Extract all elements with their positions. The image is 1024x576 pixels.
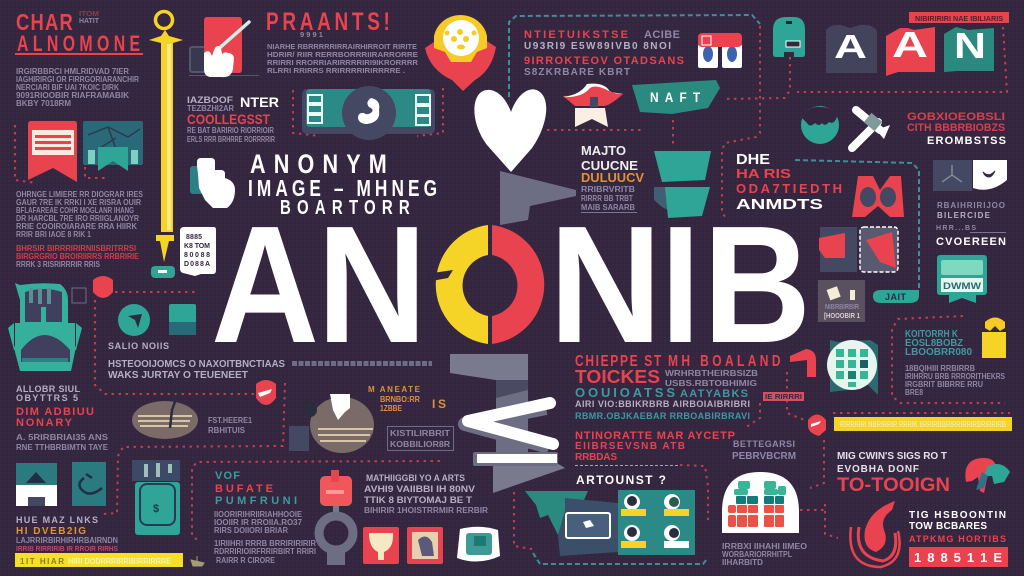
text block: erombstss: CITH BBBRBIOBZS [907,122,1005,134]
banner: yellow bar left: 1IT HIAR [20,557,64,566]
text block: small gray: FST.HEERE1 [208,416,252,425]
icon: teal tag [151,266,175,278]
banner: teal ribbon naft [632,80,720,114]
text block: orange note: M ANEATE [368,385,421,394]
text block: cvoereen: CVOEREEN [936,236,1006,248]
heading: char alnomone: ALNOMONE [17,33,140,57]
text block: intro paragraph [16,67,139,108]
text block: top center [524,29,684,78]
badge: red box with numbers [909,547,1008,567]
text block: hue maz links: HUE MAZ LNKS [16,515,98,525]
callout: speech card: D088A [184,261,210,268]
text block: center right headline: RBMR.OBJKAEBAR RRBOABIRBRAVI [575,411,750,421]
icon tiles: letters a a n: N [954,25,986,66]
text block: allobr: ALLOBR SIUL [16,384,80,394]
icon tiles: letters a a n: A [834,28,867,65]
text block: salio notes: HSTEOOIJOMCS O NAXOITBNCTIAAS [108,359,285,370]
text block: right gray paragraph: IRGBRIT BIBRRE RRU [905,380,983,389]
text block: center right headline: CHIEPPE ST [575,351,662,369]
text block: intro paragraph: 9091RIOOBIR RIAFRAMABIK [16,91,129,100]
text block: lower center: AVHI9 VAIIBBI IH 80NV [364,484,475,494]
subtitle: anonym image board: ANONYM [250,150,387,180]
icon: green bookmark card: DWMW [943,281,982,291]
main title: anonib: N [549,192,662,378]
text block: majto: MAIB SARARB [581,203,635,212]
text block: vof bufate: IOOIIR IR RROIIA.RO37 [214,518,303,527]
icon: yellow medal [425,15,496,91]
icon: backpack [8,283,86,371]
text block: second paragraph: BFLAFAREAE COHR MOGLANR IHANG [16,206,134,215]
icon: teal house tile [16,463,57,506]
text block: salio notes [108,341,285,381]
heading: char alnomone [15,10,143,57]
text block: hue maz links [16,515,118,553]
text block: dhe anmdts: ANMDTS [736,196,823,213]
text block: top center: ACIBE [644,29,680,41]
icon: red hat [563,84,623,127]
text block: praants paragraph: RRIRRI RRORRIARIRRRRIRI9IKRORRRR [267,60,418,67]
text block: allobr: DIM ADBIUU [16,406,94,418]
text block: praants paragraph [267,32,418,75]
icon: teal tile [169,304,196,335]
icon: white teal badge [457,527,500,562]
text block: intro paragraph: NERCIARI BIF UAI 7KOIC DIRK [16,83,119,92]
text block: erombstss: EROMBSTSS [927,135,1006,147]
text block: second paragraph: OHRNGE LIMIERE RR DIOGRAR IRES [16,190,144,199]
text block: center right headline: RRBDAS [575,452,617,463]
text block: praants paragraph: NIARHE RBRRRRRIRRAIRHIRROIT RIRITE [267,44,417,51]
main title: anonib [211,192,811,378]
text block: center right headline: USBS.RBTOBHIMIG [665,379,757,388]
text block: intro paragraph: IRGIRBBRCI HMLRIDVAD 7IER [16,67,129,76]
callout: speech card: K8 TOM [184,243,210,250]
icon: teal gadget: $ [153,503,159,515]
text block: vof bufate: RIRS DOIIORI BRIAR [214,526,288,535]
icon: green bookmark card [937,255,987,303]
text block: salio notes: WAKS JURTAY O TEUENEET [108,370,248,381]
tag: red small label: IE RIRRRI [765,394,802,401]
text block: right gray paragraph: KOITORRH K [905,329,959,340]
icon: red bookmark [28,121,77,182]
text block: lower center: TTIK 8 BIYTOMAJ BE T [364,495,473,505]
text block: bettegarsi [732,439,796,462]
icon: teal map with ribbon [83,121,143,171]
icon: shoes [698,33,742,68]
text block: below dome: IRRBXI IIHAHI IIMEO [722,542,807,551]
text block: right gray paragraph: IRIHRRU BRB RRRORITHEKRS [905,372,1006,381]
icon: red tile with cream funnel [363,527,399,564]
text block: center right headline: ARTOUNST ? [576,473,666,487]
dashed row of squares [292,361,432,366]
icon: teal ticket [302,86,435,140]
text block: center right headline: EIIBRSEVSNB ATB [575,441,685,452]
text block: tig hsboontin: TOW BCBARES [909,521,987,532]
text block: dhe anmdts [736,151,842,213]
text block: cvoereen: H R R . . . B S [936,225,976,232]
icon: red pin left [93,276,113,298]
text block: collegsst: RE BAT BARIRIO RIORRIOIR [187,126,274,135]
icon: teal circle [118,304,150,336]
text block: allobr: OBYTTRS 5 [16,393,78,403]
outlined gray box: KISTILIRBRIT [390,429,450,438]
text block: top center: 9IRROKTEOV OTADSANS [524,55,684,67]
text block: red note: RRRK 3 RISRIRRRIR RRIS [16,260,101,269]
text block: second paragraph: GAUR 7RE IK RRKI I XE RISRA OUIR [16,198,141,207]
icon: red drop pin [808,414,826,436]
icon: teal globe grid [827,340,878,395]
icon: red and teal trees [965,458,1010,493]
callout: speech card: 80088 [184,252,210,259]
badge: teal pill: JAIT [885,292,906,302]
icon: teal squiggle tile [72,462,106,506]
text block: right gray paragraph: EOSL8BOBZ [905,338,963,349]
icon: gray note card: [HOOOBIR 1 [824,313,860,320]
text block: allobr: NONARY [16,417,73,429]
text block: small gray: RBHITUIS [208,426,246,435]
icon: gray y shape with white chevron [450,354,565,493]
subtitle: anonym image board [248,150,437,219]
icon: split tiles [819,227,898,272]
heading: char alnomone: HATIT [79,18,100,25]
icon: red tile with portrait [407,527,443,564]
text block: center right headline: NTINORATTE MAR AYCETP [575,430,735,442]
text block: collegsst: ERLS RRR BRHRRE RORRRRIR [187,135,275,144]
text block: vof bufate: VOF [215,470,240,482]
text block: below dome: IIHARBITD [722,558,763,567]
text block: majto: CUUCNE [581,158,638,173]
icon: teal gadget [132,460,180,535]
text block: center right headline: AIRI VIO:BBIKRBRB AIRBOIAIBRIBRI [575,399,750,409]
icon tiles: letters a a n [826,24,994,76]
heading: char alnomone: CHAR [16,10,73,36]
text block: bettegarsi: PEBRVBCRM [732,451,796,462]
text block: allobr [16,384,109,452]
text block: lower center: MATHIIGGBI YO A ARTS [366,473,465,483]
text block: second paragraph [16,190,144,239]
text block: second paragraph: RRIE COOIROIARARE RRA HIIRK [16,222,137,231]
text block: to-tooign [837,451,950,496]
icon: red and gray device [319,470,353,565]
text block: below dome: WORBARIORRHITPL [722,550,792,559]
text block: dhe anmdts: HA RIS [736,166,791,181]
text block: hue maz links: LAJRRIRBIRHIRHRBAIRNDN [16,536,118,545]
text block: cvoereen [936,201,1006,248]
text block: orange note: IS [432,397,446,411]
icon: teal helmet [801,106,839,144]
text block: tig hsboontin [909,510,1006,544]
text block: erombstss [907,111,1006,147]
text block: collegsst [187,94,279,144]
main title: anonib: I [661,192,700,378]
text block: dhe anmdts: ODA7TIEDTH [736,181,842,196]
banner: yellow bar left: HIRI DODRRRIRRIBIRRIRRRE [68,557,172,566]
text block: vof bufate: PUMFRUNI [215,495,297,507]
text block: top center: U93RI9 E5W89IVB0 8NOI [524,41,671,52]
subtitle: anonym image board: IMAGE – MHNEG [248,177,437,202]
icon: small boat [191,556,204,566]
text block: vof bufate: RAIRR R CIRORE [216,556,276,565]
icon: red x tile [852,176,904,217]
icon: yellow sword [149,12,183,262]
main title: anonib: N [317,192,427,378]
main title: anonib: B [703,192,811,378]
heading: char alnomone: ITOM [79,11,99,18]
text block: majto: RIRRR BB TRBT [581,194,633,203]
text block: center right headline: MH BOALAND [668,351,780,369]
icon: white hand [190,158,235,208]
text block: allobr: A. 5RIRBRIAI35 ANS [16,433,109,442]
panel: teal card with figures [618,490,695,555]
icon: white heart [474,89,546,172]
icon: red flame spiral [850,501,900,567]
subtitle: anonym image board: BOARTORR [280,196,410,219]
text block: collegsst: NTER [240,94,279,110]
text block: vof bufate: IIOORIRIHRIIRIAHHOOIE [214,510,303,519]
icon: cracked brown pot [132,388,198,439]
text block: red note: BHRSIR BIRRRIRIRNIISBRITRRSI [16,244,136,253]
text block: praants paragraph: RLRRI RRIRRS RRIRRRRIRIRRRRE . [267,68,405,75]
callout: speech card [180,227,216,276]
text block: hue maz links: HI DVEB2IG [16,526,86,537]
text block: collegsst: COOLLEGSST [187,111,270,127]
text block: vof bufate: 1IRIIHRI RRRB BRRIRIRIRIR [214,539,316,548]
text block: majto [581,143,644,213]
text block: vof bufate [214,470,316,565]
text block: erombstss: GOBXIOEOBSLI [907,111,1005,123]
banner: red top right [909,12,1009,23]
text block: to-tooign: TO-TOOIGN [837,475,950,496]
text block: top center: NTIETUIKSTSE [524,29,628,41]
text block: lower center: BIHIRIR 1HOISTRRMIR RERBIR [364,506,488,515]
text block: small gray [208,416,252,435]
text block: to-tooign: EVOBHA DONF [837,464,919,475]
text block: second paragraph: RRIR BRI IAOE 8 RIK 1 [16,230,91,239]
heading: praants: PRAANTS! [266,7,390,36]
text block: below dome [722,542,807,567]
tag: red small label [763,392,804,401]
icon: hand and pen on red card [189,17,259,77]
badge: red box with numbers: 1 8 8 5 1 1 E [914,550,1002,565]
text block: red note: BIRGRGRIO BROIRIIRRS RRBRIRIE [16,252,140,261]
text block: center right headline [575,351,780,487]
text block: cvoereen: BILERCIDE [937,211,991,220]
icon: yellow figure [982,318,1006,358]
text block: majto: DULUUCV [581,170,644,185]
text block: majto: MAJTO [581,143,626,158]
banner: yellow bar right [834,417,1012,431]
text block: right gray paragraph: 18BQIHIII RRBIRRB [905,364,975,373]
icon: white wrench [852,110,890,148]
text block: right gray paragraph: LBOOBRR080 [905,347,972,358]
icon: gray anvil [500,171,576,225]
icon: red pin center [256,380,276,405]
main title: anonib: A [211,192,319,378]
text block: lower center [364,473,488,515]
text block: orange note [368,385,446,413]
text block: bettegarsi: BETTEGARSI [733,439,795,449]
text block: intro paragraph: BKBY 7018RM [16,99,71,108]
badge: teal pill [873,290,919,303]
banner: teal ribbon naft: NAFT [650,89,700,105]
text block: right gray paragraph: BRE8 [905,388,923,397]
icon: gray note card [818,280,865,322]
icon tiles: letters a a n: A [892,24,928,65]
icon: dark tile and white shield [933,160,1007,191]
text block: second paragraph: DR HARCBL 7RE IRO RRIIGLANOYR [16,214,139,223]
banner: yellow bar left [15,553,183,567]
text block: cvoereen: RBAIHRIRIJOO [937,201,1005,210]
text block: center right headline: OOUIOATSS [575,385,675,400]
text block: vof bufate: BUFATE [215,483,273,495]
text block: praants paragraph: HDRIR/ RIIR RERRBORRRIIRARRORRE [267,52,418,59]
callout: speech card: 8885 [186,234,202,241]
icon: teal cups [654,151,711,218]
text block: orange note: BRNBO:RR [380,395,420,404]
text block: intro paragraph: IAGHIRIRGI OR FIRRGORIARANCHIR [16,75,139,84]
text block: center right headline: WRHRBTHEIRBSIZB [665,369,758,378]
text block: tig hsboontin: ATPKMG HORTIBS [909,534,1006,544]
text block: tig hsboontin: TIG HSBOONTIN [909,510,1006,521]
icon: white arch dome [722,472,799,533]
text block: collegsst: TEZBZHI2AR [187,104,234,113]
text block: orange note: 1ZBBE [380,404,403,413]
icon: red arrow [790,349,816,377]
text block: to-tooign: MIG CWIN'S SIGS RO T [837,451,947,462]
text block: majto: RRIBRVRITB [581,185,635,194]
outlined gray box [388,426,454,450]
text block: center right headline: AATYABKS [680,388,748,400]
scene: teal flag and screen [525,491,618,556]
text block: center right headline: TOICKES [575,367,660,387]
text block: allobr: RNE TTHBRBIMTN TAYE [16,443,109,452]
text block: collegsst: IAZBOOF [187,95,234,105]
banner: red top right: NIBIRIRIRI NAE IBILIARIS [915,16,1003,23]
outlined gray box: KOBBILIOR8R [390,440,450,449]
text block: vof bufate: RDRRIRIOIRFRRIRBIRT RRIRI [214,547,316,556]
text block: salio notes: SALIO NOIIS [108,341,169,351]
icon: gray note card: NIBRBIRBIR [825,304,859,311]
text block: praants paragraph: 9 9 9 1 [300,32,323,39]
text block: right gray paragraph [905,329,1006,397]
icon: brown pot right [289,394,374,453]
text block: hue maz links: IRRIB RIRRIRIB IR RROIR RIRHS [16,546,118,553]
text block: red note [16,244,140,269]
icon: teal robot [773,17,805,57]
text block: top center: S8ZKRBARE KBRT [524,67,630,78]
text block: dhe anmdts: DHE [736,151,770,168]
